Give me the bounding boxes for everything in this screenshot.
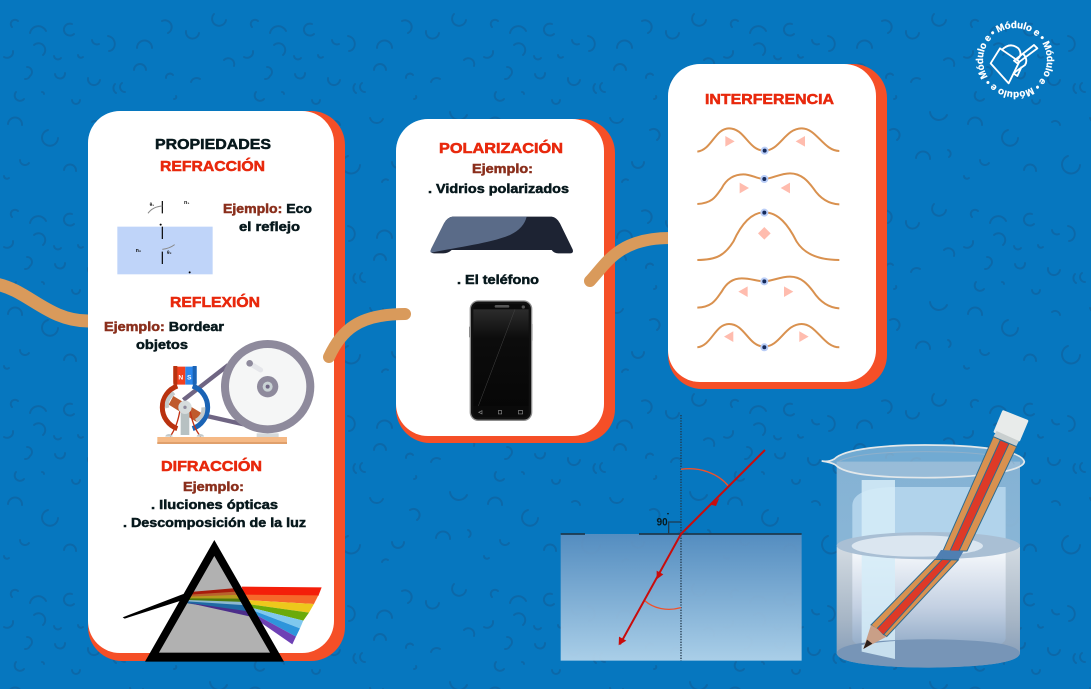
connector: left squiggle — [0, 284, 88, 321]
illustration: polarized glass — [430, 217, 573, 253]
illustration: phone — [469, 301, 532, 420]
logo: módulo e: Módulo e • Módulo e • Módulo e • Módulo e • — [976, 20, 1054, 100]
panel: polarización — [396, 119, 615, 443]
connector: right squiggle — [590, 238, 670, 281]
text: objetos: objetos — [136, 337, 188, 352]
diagram: refraction: n₁ — [184, 200, 190, 206]
text: el teléfono: . El teléfono — [457, 272, 539, 287]
illustration: refraction ray diagram — [561, 415, 802, 661]
text: iluciones ópticas: . Iluciones ópticas — [151, 497, 278, 512]
diagram: refraction: θ₁ — [150, 202, 154, 207]
text: vidrios polarizados: . Vidrios polarizados — [428, 181, 569, 196]
heading: refracción: REFRACCIÓN — [160, 157, 265, 175]
illustration: refraction ray diagram: 90 — [657, 516, 668, 528]
diagram: refraction: n₂ — [136, 248, 142, 254]
heading: difracción: DIFRACCIÓN — [161, 457, 262, 475]
text: ejemplo: Ejemplo: — [472, 161, 533, 176]
heading: reflexión: REFLEXIÓN — [170, 293, 260, 311]
diagram: refraction — [117, 200, 213, 274]
panel: propiedades — [88, 111, 345, 662]
text: el reflejo: el reflejo — [239, 219, 300, 234]
heading: interferencia: INTERFERENCIA — [705, 91, 834, 108]
text: ejemplo bordear: Ejemplo: Bordear — [104, 319, 224, 334]
illustration: generator — [157, 340, 314, 444]
illustration: prism — [123, 540, 322, 662]
illustration: generator: N — [178, 374, 183, 381]
connector: middle squiggle — [329, 314, 405, 357]
panel: interferencia — [668, 64, 887, 389]
heading: propiedades: PROPIEDADES — [155, 137, 271, 153]
chart: wave interference — [697, 128, 839, 351]
diagram: refraction: θ₂ — [167, 250, 172, 255]
illustration: beaker with pencil — [822, 412, 1027, 668]
text: descomposición de la luz: . Descomposición de la luz — [123, 515, 307, 530]
text: ejemplo eco: Ejemplo: Eco — [223, 201, 312, 216]
heading: polarización: POLARIZACIÓN — [439, 139, 563, 157]
text: ejemplo: Ejemplo: — [183, 479, 244, 494]
icon: book and pencil — [991, 45, 1037, 83]
illustration: generator: S — [187, 374, 192, 381]
